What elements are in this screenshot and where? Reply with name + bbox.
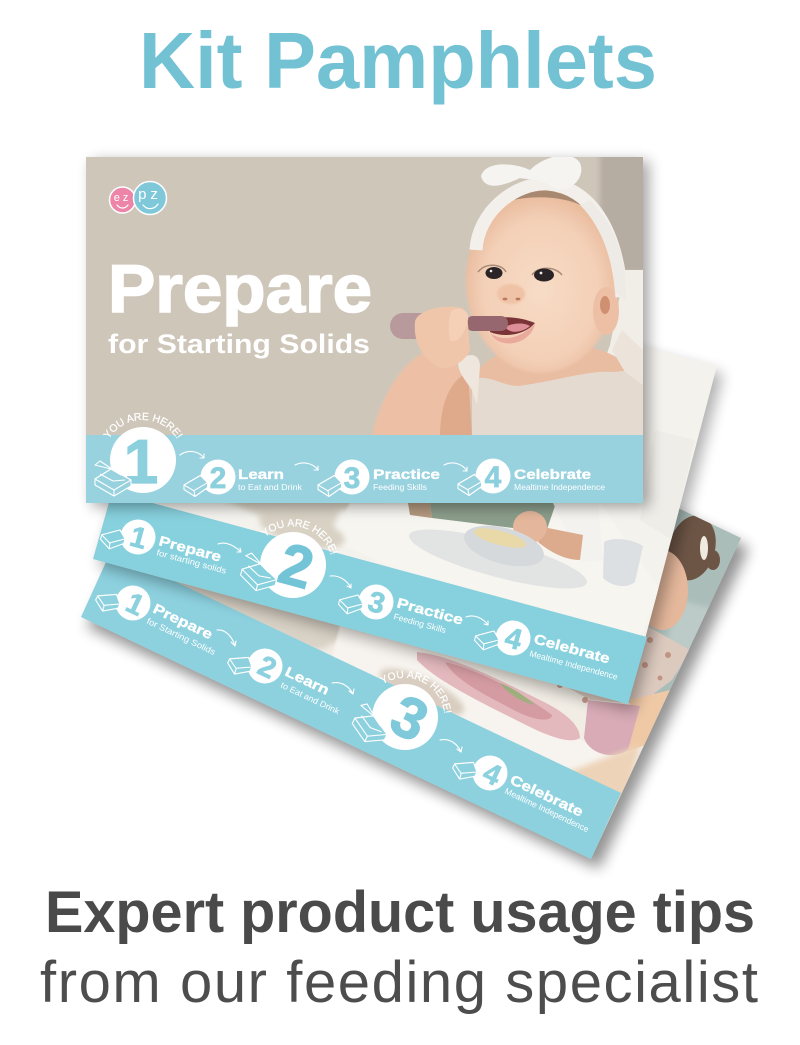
arrow — [217, 630, 236, 646]
step 3: practice: 3 — [364, 586, 388, 621]
headband — [476, 184, 622, 297]
step 4: celebrate — [473, 620, 619, 682]
step band — [86, 435, 643, 503]
step 3: practice — [318, 460, 440, 496]
arm — [372, 352, 472, 437]
pamphlet: step 1 card — [84, 152, 658, 516]
step 2: learn — [184, 460, 303, 496]
step 1: prepare: Prepare — [151, 600, 216, 642]
step 3: practice: 3 — [344, 462, 360, 495]
step 2: learn: Learn — [238, 466, 284, 482]
step band — [81, 551, 621, 859]
step 2: learn: 2 — [210, 462, 226, 495]
step 2: you are here — [240, 519, 338, 602]
step 1: prepare: Prepare — [157, 532, 223, 565]
step 4: celebrate — [458, 458, 605, 496]
arrow — [295, 463, 318, 470]
step 3: you are here — [352, 670, 452, 755]
arrow — [180, 451, 204, 458]
heading: prepare: Prepare — [108, 251, 372, 327]
caption: bold line: Expert product usage tips — [45, 880, 755, 945]
step 2: learn: to Eat and Drink — [279, 680, 342, 717]
step 1: you are here: 1 — [124, 428, 158, 497]
step 4: celebrate: Mealtime Independence — [514, 482, 605, 492]
step 4: celebrate: 4 — [478, 757, 506, 793]
step 4: celebrate: Celebrate — [532, 630, 612, 666]
step 4: celebrate: 4 — [485, 461, 502, 494]
subheading: for Starting Solids — [108, 329, 370, 359]
step 4: celebrate: 4 — [501, 622, 525, 657]
step 1: you are here: YOU ARE HERE! — [102, 412, 183, 438]
step 3: you are here: 3 — [381, 682, 438, 755]
step 2: learn: Learn — [283, 663, 332, 698]
step 1: prepare: 1 — [121, 587, 149, 623]
step 3: practice: Feeding Skills — [392, 611, 447, 635]
logo: ez — [114, 192, 131, 204]
step 3: practice — [337, 584, 465, 635]
step 1: prepare: for starting solids — [155, 547, 228, 576]
step 2: learn: 2 — [253, 650, 281, 686]
step 2: learn — [225, 648, 342, 717]
step 1: prepare — [93, 586, 217, 657]
caption: regular line: from our feeding specialist — [40, 950, 758, 1015]
step 4: celebrate: Mealtime Independence — [528, 648, 619, 682]
step 1: you are here — [94, 412, 183, 497]
arrow — [218, 543, 241, 552]
step 4: celebrate: Celebrate — [514, 466, 591, 482]
arrow — [332, 683, 354, 694]
title: Kit Pamphlets — [139, 16, 657, 105]
arrow — [466, 616, 488, 625]
step 4: celebrate: Celebrate — [508, 771, 586, 820]
step 3: practice: Practice — [373, 466, 440, 482]
photo: baby with bowl on tray — [106, 348, 716, 704]
pamphlet: step 2 card — [92, 345, 728, 717]
step 1: prepare: for Starting Solids — [145, 616, 217, 657]
photo: baby with pink plate — [100, 509, 741, 859]
eyes — [478, 265, 506, 272]
step 3: practice: Practice — [395, 594, 465, 628]
step 3: you are here: YOU ARE HERE! — [380, 670, 452, 713]
step 4: celebrate — [450, 755, 591, 834]
arrow — [444, 463, 467, 471]
step 1: prepare — [99, 520, 228, 576]
logo: pz — [138, 186, 162, 203]
step band — [93, 492, 647, 704]
hand — [415, 307, 470, 368]
step 4: celebrate: Mealtime Independence — [503, 786, 591, 834]
step 2: learn: to Eat and Drink — [238, 482, 303, 492]
logo — [110, 182, 166, 214]
mouth — [490, 317, 535, 335]
face — [466, 189, 616, 373]
arrow — [440, 740, 462, 752]
chest and shoulder — [479, 348, 624, 386]
step 3: practice: Feeding Skills — [373, 482, 427, 492]
photo: baby with spoon — [372, 150, 650, 437]
nose — [497, 284, 525, 304]
spoon — [390, 313, 422, 339]
arrow — [330, 576, 351, 588]
pamphlet: step 3 card — [81, 506, 755, 875]
step 2: you are here: 2 — [272, 531, 320, 602]
step 1: prepare: 1 — [126, 521, 150, 556]
step 2: you are here: YOU ARE HERE! — [260, 519, 338, 554]
dress — [472, 370, 643, 437]
